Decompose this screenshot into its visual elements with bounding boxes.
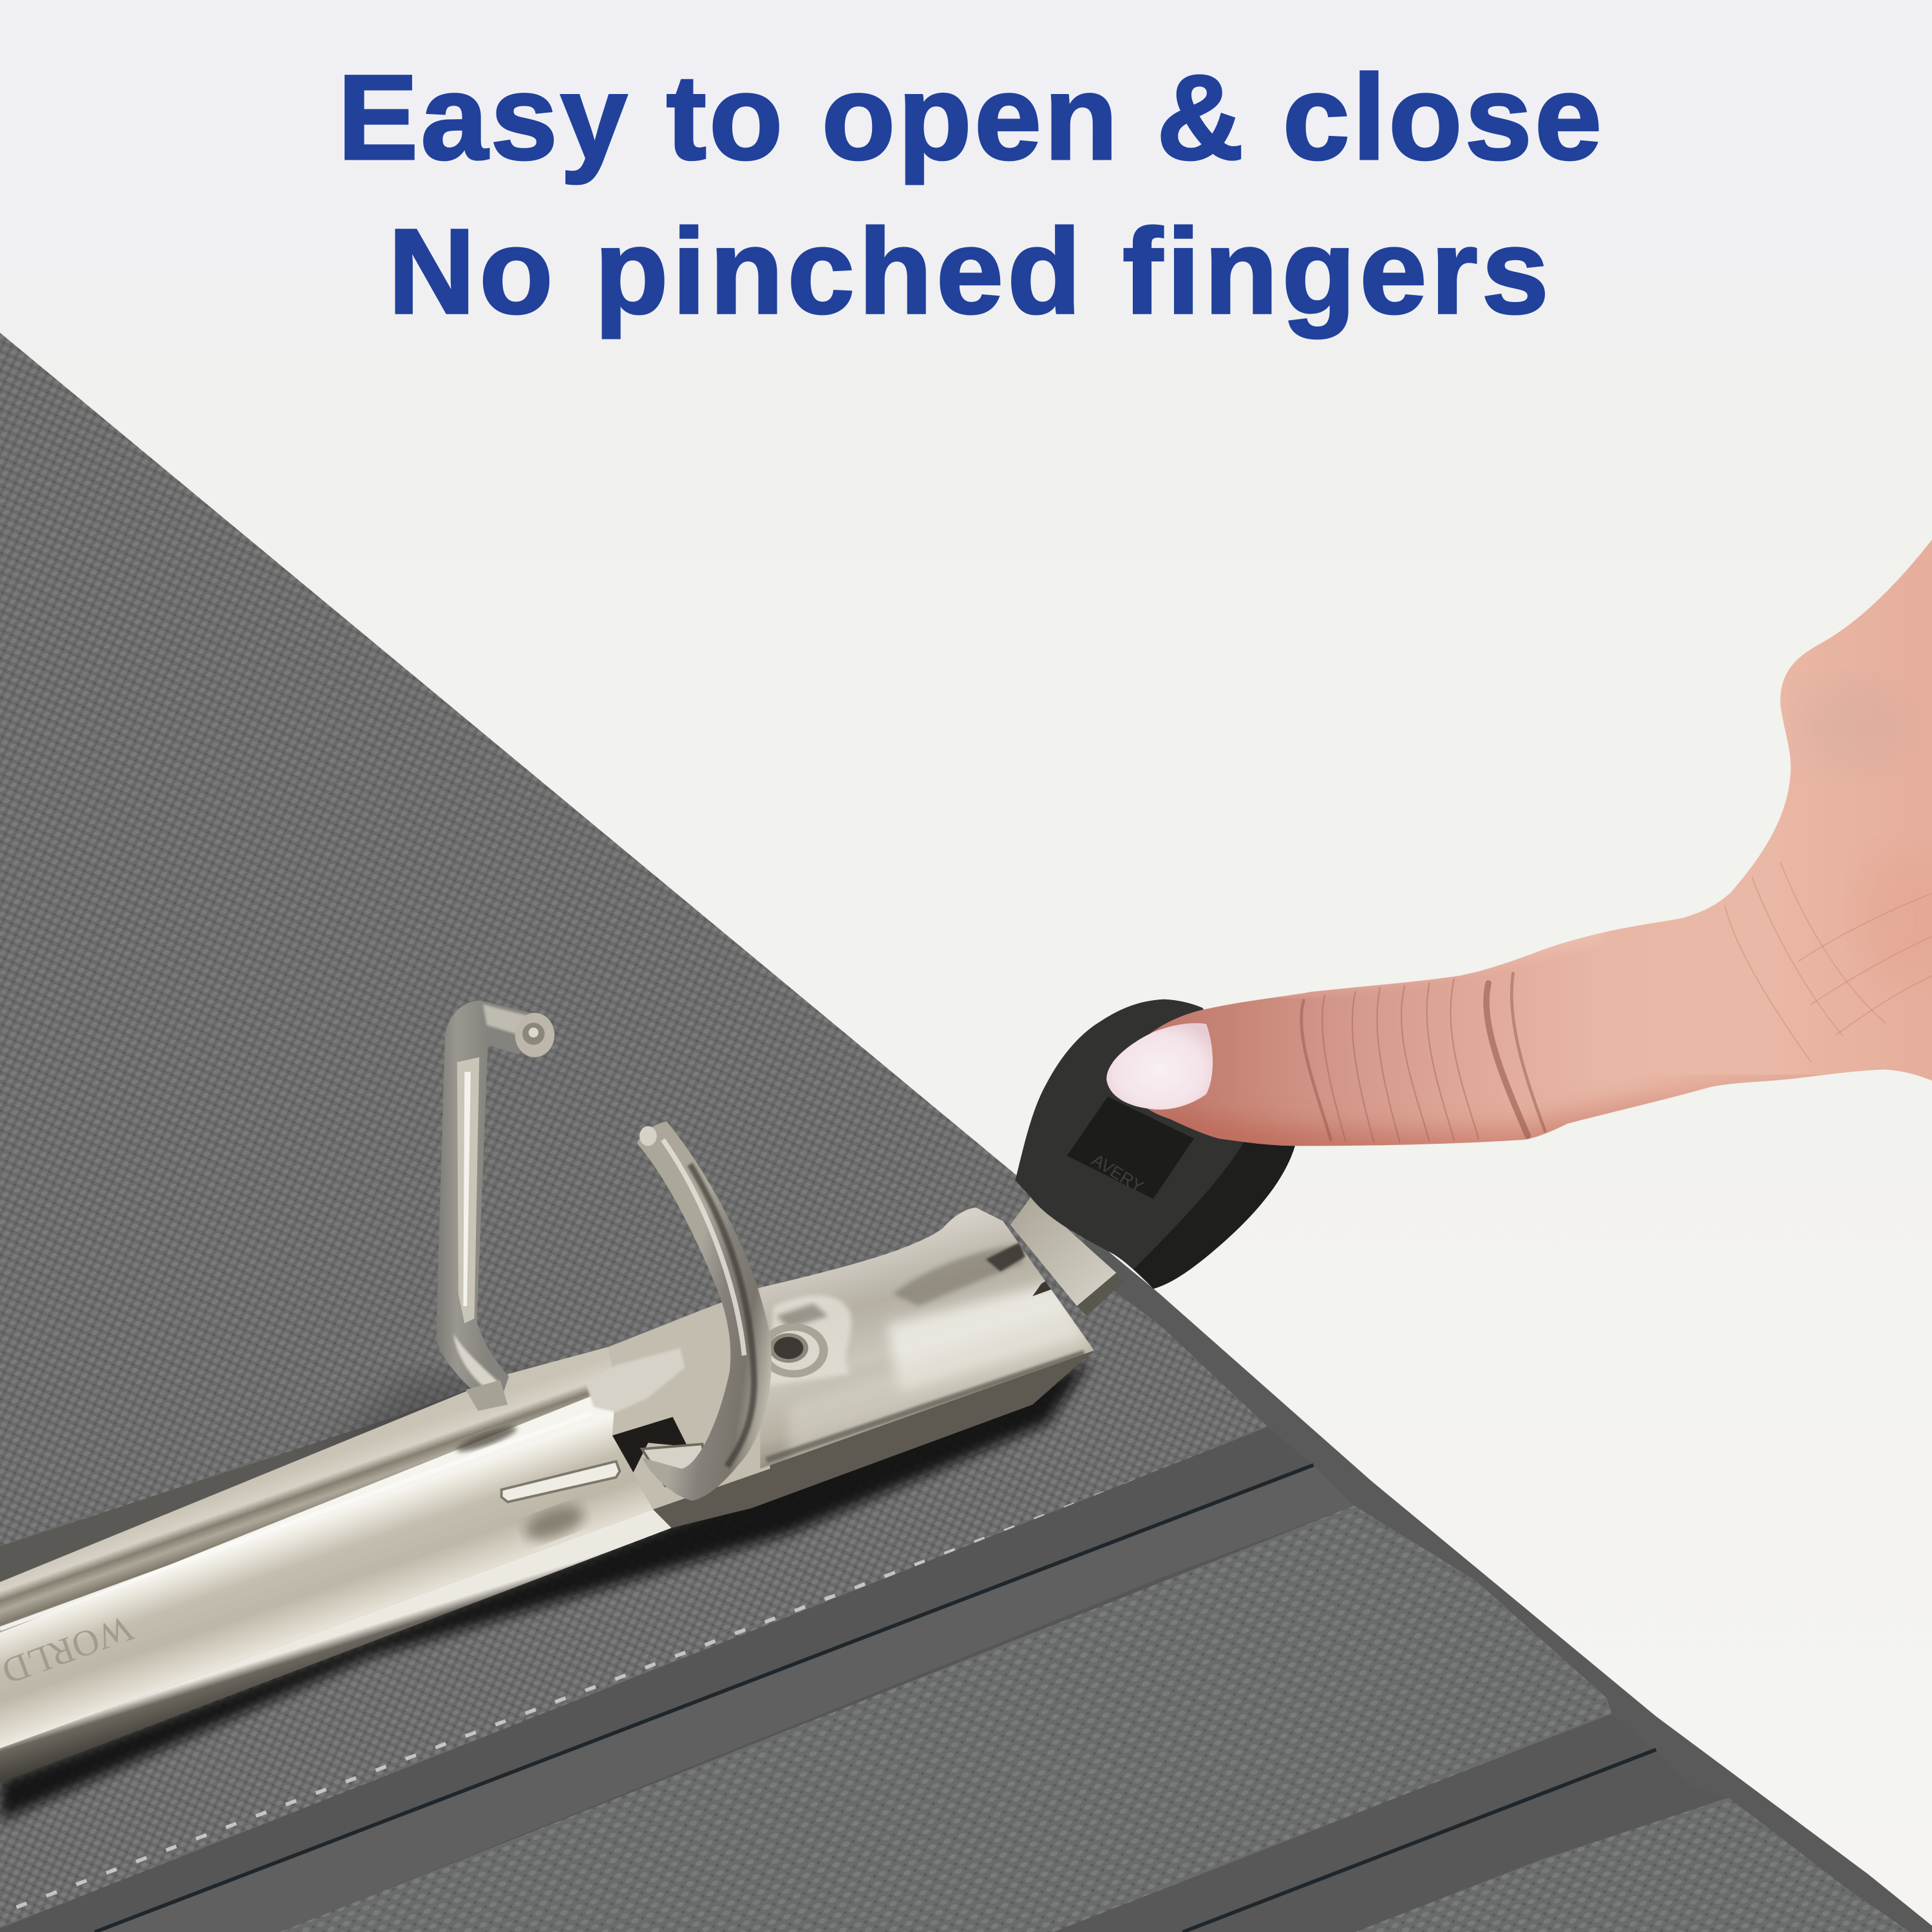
- plate highlight line: [0, 1414, 591, 1629]
- spine strip one: [0, 1427, 1354, 1932]
- shadow band under mechanism on cover: [0, 1374, 509, 1582]
- slot embossing: [502, 1461, 620, 1502]
- headline line 2: No pinched fingers: [388, 204, 1549, 339]
- binder right margin: [1084, 1220, 1932, 1932]
- metal prong mechanism: [0, 1208, 1094, 1783]
- ring end cap: [515, 1013, 554, 1057]
- rear ring shadow: [320, 1374, 579, 1466]
- ridge band: [0, 1347, 616, 1633]
- binder panel lower: [279, 1506, 1612, 1932]
- center plate: [609, 1287, 770, 1510]
- finger creases: [1302, 862, 1932, 1142]
- headline: [337, 50, 1602, 339]
- finger and hand: [1106, 540, 1932, 1151]
- plate right end: [760, 1208, 1094, 1469]
- right lower side: [653, 1350, 1094, 1528]
- key lever neck: [1010, 1197, 1116, 1306]
- smudge under slot: [521, 1500, 588, 1546]
- front binder ring: [637, 1121, 772, 1501]
- plate dark smudge near ridge: [455, 1423, 519, 1456]
- main plate face: [0, 1386, 653, 1748]
- logo plate: AVERY: [1088, 1150, 1147, 1197]
- skin shading: [1158, 680, 1932, 1151]
- logo plate: [1067, 1097, 1194, 1199]
- engraved brand text: WORLD: [0, 1607, 138, 1692]
- lever handle: [1016, 999, 1295, 1289]
- binder panel far corner: [1356, 1797, 1910, 1932]
- lever neck lower edge: [1077, 1273, 1124, 1316]
- spine strip two: [1054, 1714, 1728, 1932]
- fingernail: [1106, 1023, 1213, 1110]
- reflections on plate end: [764, 1242, 1094, 1460]
- clasp metal: [642, 1444, 707, 1486]
- rear binder ring: [436, 1001, 554, 1411]
- mechanism shadow: [0, 1361, 1090, 1821]
- clasp gap: [612, 1417, 688, 1472]
- stitching: [0, 1470, 1164, 1913]
- headline line 1: Easy to open & close: [337, 50, 1602, 185]
- clasp bump: [585, 1348, 685, 1412]
- lower plate side: [0, 1510, 672, 1783]
- rivet: [759, 1323, 828, 1378]
